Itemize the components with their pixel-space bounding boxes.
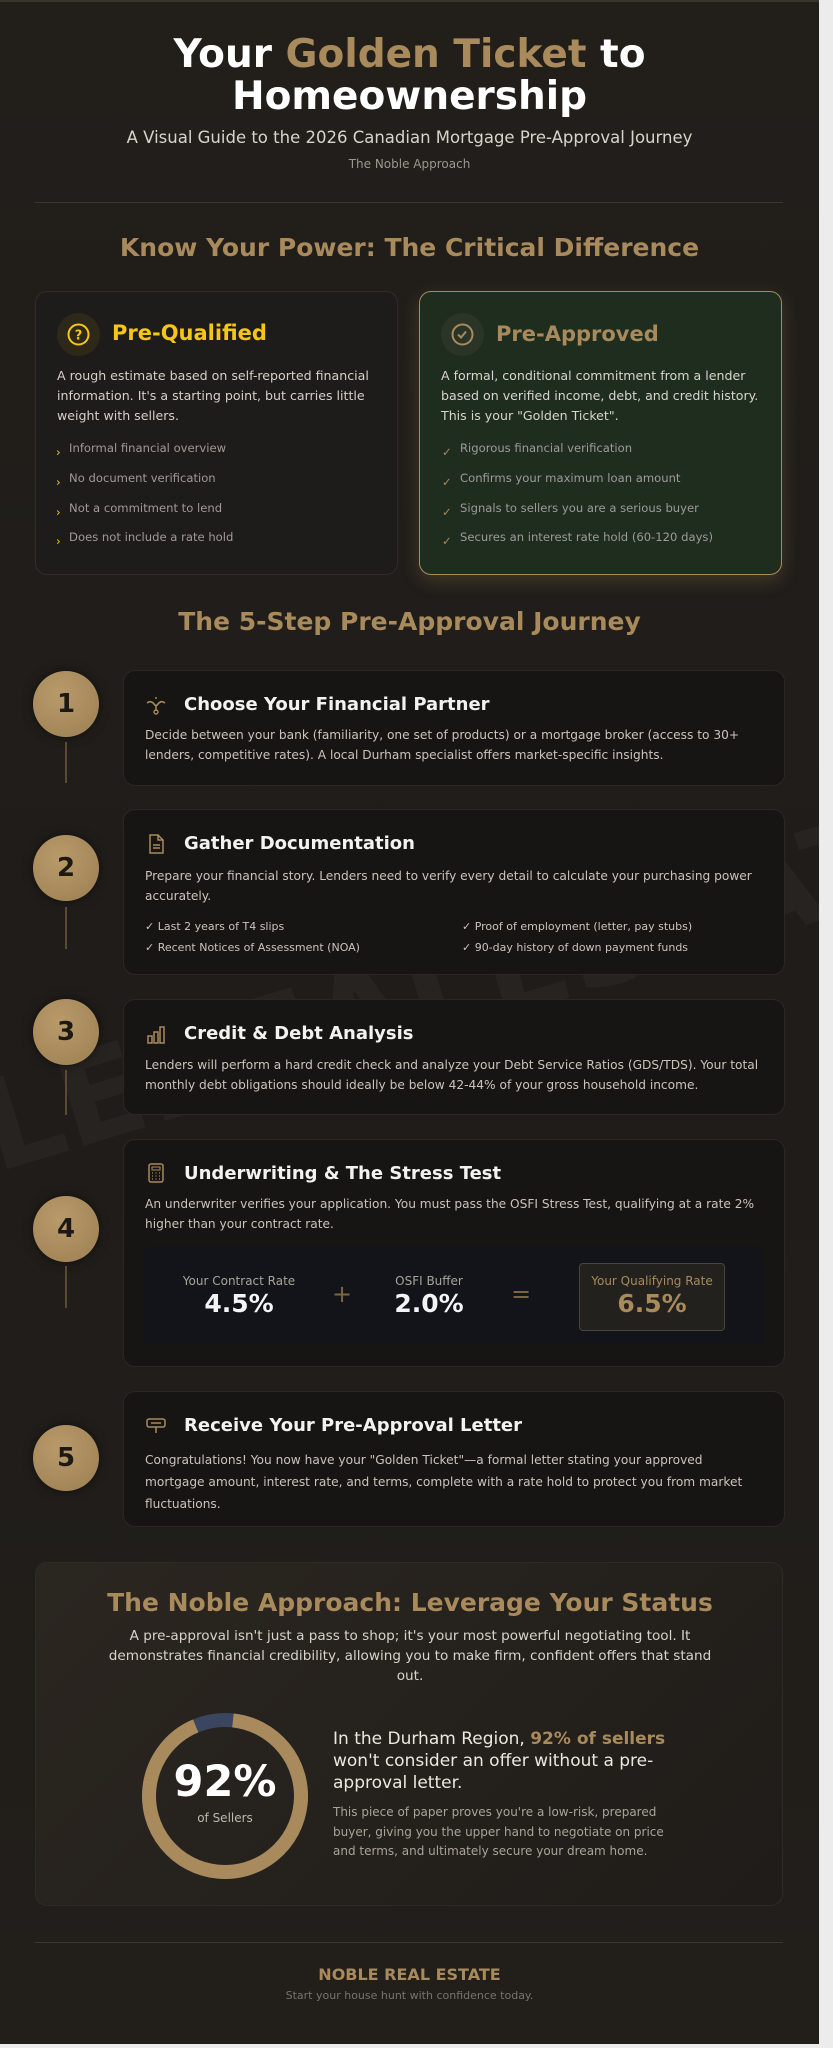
step 2 number: 2	[57, 853, 75, 883]
heading: The Noble Approach: Leverage Your Status	[107, 1588, 713, 1617]
icon: document	[149, 834, 164, 854]
step 3 card: Credit & Debt Analysis	[184, 1023, 413, 1044]
heading: Pre-Qualified	[112, 321, 267, 345]
panel: pre-approved: ✓	[442, 534, 452, 548]
text: A formal, conditional commitment from a lender based on verified income, debt, and credit history. This is your "Golden Ticket".	[441, 368, 758, 423]
step 3 number	[33, 999, 99, 1065]
step 1 card	[123, 670, 785, 786]
subtitle: A Visual Guide to the 2026 Canadian Mortgage Pre-Approval Journey	[127, 128, 692, 147]
panel: pre-approved: Rigorous financial verification	[460, 441, 632, 455]
supporting text: This piece of paper proves you're a low-risk, prepared buyer, giving you the upper hand to negotiate on price and terms, and ultimately secure your dream home.	[333, 1805, 664, 1858]
panel: noble approach	[35, 1562, 783, 1906]
checklist: ✓ Last 2 years of T4 slips	[145, 920, 284, 933]
rate equation: 2.0%	[394, 1289, 464, 1318]
panel: pre-approved: Secures an interest rate hold (60-120 days)	[460, 530, 713, 544]
step 2 card	[123, 809, 785, 975]
panel: pre-qualified: ›	[56, 534, 61, 548]
step 3 card	[123, 999, 785, 1115]
step 2 card: ✓ 90-day history of down payment funds	[462, 941, 688, 954]
step 1 number	[33, 671, 99, 737]
check list	[442, 441, 713, 548]
checklist	[145, 920, 360, 954]
title: Homeownership	[232, 74, 587, 119]
rate equation: Your Qualifying Rate	[591, 1274, 713, 1288]
heading: 5-step journey: The 5-Step Pre-Approval Journey	[178, 607, 641, 636]
step 2 card: Gather Documentation	[184, 833, 415, 854]
step 5 card: Receive Your Pre-Approval Letter	[184, 1415, 522, 1436]
step 4 card: Underwriting & The Stress Test	[184, 1163, 501, 1184]
step 5 number	[33, 1425, 99, 1491]
rate equation: 6.5%	[617, 1289, 687, 1318]
icon: partner	[146, 697, 166, 715]
text: A rough estimate based on self-reported financial information. It's a starting point, but carries little weight with sellers.	[57, 368, 369, 423]
heading: Pre-Approved	[496, 322, 659, 346]
rate equation: =	[511, 1280, 531, 1308]
icon: question	[57, 313, 100, 356]
panel: pre-qualified: No document verification	[69, 471, 216, 485]
step 1 card: Decide between your bank (familiarity, one set of products) or a mortgage broker (access to 30+ lenders, competitive rates). A local Durham specialist offers market-specific insights.	[145, 728, 739, 762]
panel: pre-approved: Signals to sellers you are a serious buyer	[460, 501, 699, 515]
donut chart	[142, 1713, 308, 1879]
step 5 card: Congratulations! You now have your "Golden Ticket"—a formal letter stating your approved mortgage amount, interest rate, and terms, complete with a rate hold to protect you from market fluctuations.	[145, 1453, 742, 1511]
icon: question: ?	[75, 328, 82, 344]
panel: pre-approved	[419, 291, 782, 575]
panel: pre-approved: ✓	[442, 445, 452, 459]
panel: pre-qualified: Informal financial overview	[69, 441, 226, 455]
rate equation: OSFI Buffer	[395, 1274, 463, 1288]
icon: letter	[146, 1418, 166, 1433]
heading: know your power: Know Your Power: The Critical Difference	[120, 233, 699, 262]
panel: pre-qualified: Not a commitment to lend	[69, 501, 222, 515]
panel: pre-qualified: Does not include a rate hold	[69, 530, 233, 544]
panel: pre-qualified: ›	[56, 445, 61, 459]
step 3 card: Lenders will perform a hard credit check and analyze your Debt Service Ratios (GDS/TDS). Your total monthly debt obligations should ideally be below 42-44% of your gross household income.	[145, 1058, 758, 1092]
step 3 number: 3	[57, 1017, 75, 1047]
panel: pre-approved: Confirms your maximum loan amount	[460, 471, 680, 485]
intro text: A pre-approval isn't just a pass to shop; it's your most powerful negotiating tool. It demonstrates financial credibility, allowing you to make firm, confident offers that stand out.	[109, 1628, 711, 1684]
step 2 number	[33, 835, 99, 901]
step 4 card: An underwriter verifies your application. You must pass the OSFI Stress Test, qualifying at a rate 2% higher than your contract rate.	[145, 1197, 754, 1231]
step 4 card	[123, 1139, 785, 1367]
rate equation: Your Contract Rate	[183, 1274, 295, 1288]
title: Your Golden Ticket to	[173, 32, 646, 77]
step 1 card: Choose Your Financial Partner	[184, 694, 490, 715]
panel: pre-approved: ✓	[442, 475, 452, 489]
step 1 number: 1	[57, 689, 75, 719]
rate equation: +	[332, 1280, 352, 1308]
step 4 number	[33, 1196, 99, 1262]
panel: pre-approved: ✓	[442, 505, 452, 519]
checklist: ✓ Recent Notices of Assessment (NOA)	[145, 941, 360, 954]
rate equation: 4.5%	[204, 1289, 274, 1318]
step 5 card	[123, 1391, 785, 1527]
donut chart: of Sellers	[197, 1811, 253, 1825]
step 5 number: 5	[57, 1443, 75, 1473]
panel: pre-qualified: ›	[56, 505, 61, 519]
byline: The Noble Approach	[349, 157, 470, 171]
footer tagline: Start your house hunt with confidence today.	[286, 1989, 533, 2002]
icon: calculator	[148, 1163, 164, 1183]
panel: pre-qualified: ›	[56, 475, 61, 489]
step 4 number: 4	[57, 1214, 75, 1244]
bullet list	[56, 441, 233, 548]
title	[173, 32, 646, 119]
step 2 card: Prepare your financial story. Lenders need to verify every detail to calculate your purchasing power accurately.	[145, 869, 752, 903]
rate equation	[144, 1246, 763, 1344]
footer brand: NOBLE REAL ESTATE	[318, 1965, 501, 1984]
panel: pre-qualified	[35, 291, 398, 575]
donut chart: 92%	[174, 1757, 276, 1807]
icon: chart	[147, 1026, 165, 1044]
step 2 card: ✓ Proof of employment (letter, pay stubs)	[462, 920, 692, 933]
stat text: In the Durham Region, 92% of sellers won't consider an offer without a pre-approval letter.	[333, 1729, 665, 1793]
icon: check	[441, 313, 484, 356]
